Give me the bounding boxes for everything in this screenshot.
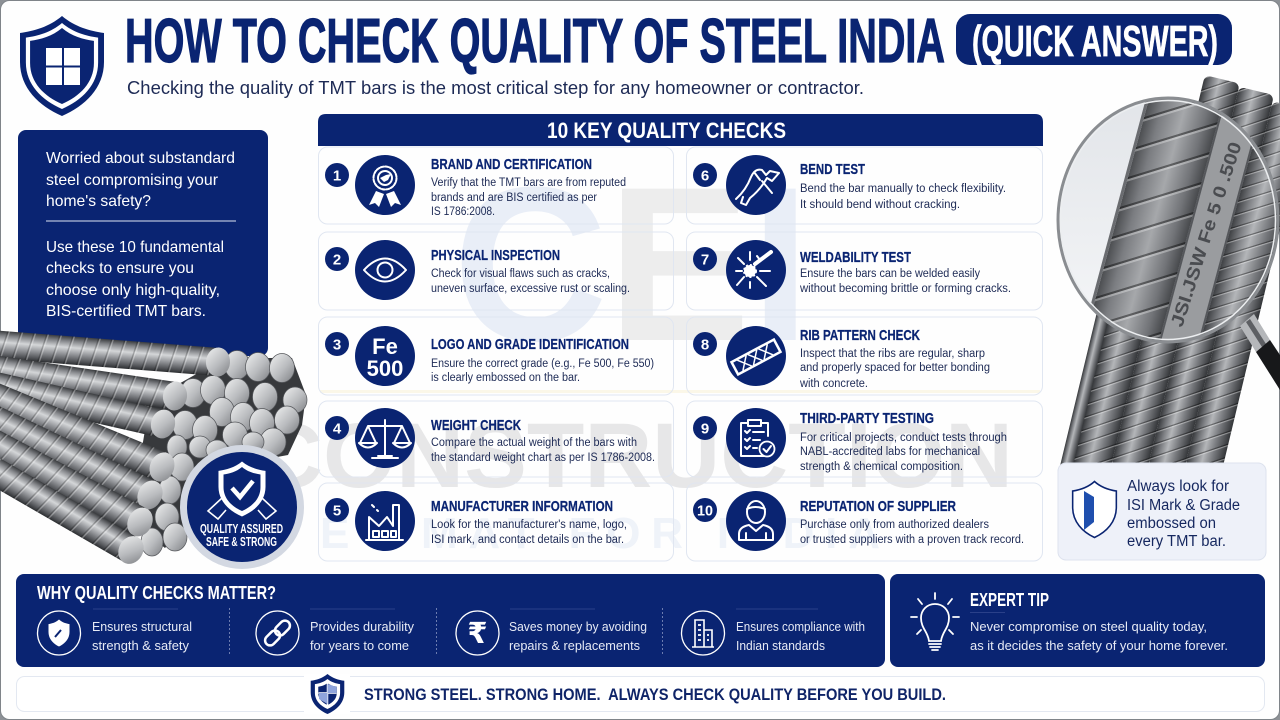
panel: expert tip: EXPERT TIP — [970, 590, 1049, 610]
footer banner — [16, 674, 1264, 714]
panel: intro: checks to ensure you — [46, 260, 194, 277]
reason: structural strength: strength & safety — [92, 638, 189, 653]
badge: quality assured — [180, 445, 304, 569]
panel: intro: Use these 10 fundamental — [46, 239, 224, 256]
check 4: weight check: the standard weight chart as per IS 1786-2008. — [431, 452, 655, 464]
check 1: brand and certification: Verify that the TMT bars are from reputed — [431, 177, 626, 189]
check 4: weight check: 4 — [333, 420, 342, 438]
magnifying glass handle — [1240, 314, 1280, 390]
callout: look for ISI mark: ISI Mark & Grade — [1127, 497, 1240, 514]
check 2: physical inspection: Check for visual flaws such as cracks, — [431, 268, 610, 280]
reason: saves money: ₹ — [467, 616, 488, 650]
badge: quality assured: SAFE & STRONG — [206, 535, 277, 549]
panel: expert tip — [890, 574, 1265, 667]
check 8: rib pattern check: Inspect that the ribs are regular, sharp — [800, 348, 985, 360]
check 3: logo and grade identification: Ensure the correct grade (e.g., Fe 500, Fe 550) — [431, 358, 654, 370]
check 3: logo and grade identification: 3 — [333, 336, 341, 354]
check 10: reputation of supplier: or trusted suppliers with a proven track record. — [800, 534, 1024, 546]
check 7: weldability test: Ensure the bars can be welded easily — [800, 268, 980, 280]
check 7: weldability test: WELDABILITY TEST — [800, 249, 911, 266]
reason: compliance — [682, 611, 865, 655]
image: TMT bars under magnifying glass — [1056, 76, 1280, 465]
check 7: weldability test: 7 — [701, 252, 709, 268]
check 8: rib pattern check — [686, 317, 1042, 395]
footer banner: STRONG STEEL. STRONG HOME. ALWAYS CHECK QUALITY BEFORE YOU BUILD. — [364, 686, 946, 704]
panel heading: 10 key quality checks: 10 KEY QUALITY CHECKS — [547, 118, 786, 143]
check 5: manufacturer information: Look for the manufacturer's name, logo, — [431, 519, 627, 531]
check 7: weldability test — [686, 232, 1042, 310]
check 8: rib pattern check: and properly spaced for better bonding — [800, 362, 990, 374]
panel: expert tip: Never compromise on steel quality today, — [970, 619, 1207, 634]
panel: intro: choose only high-quality, — [46, 282, 220, 299]
check 8: rib pattern check: with concrete. — [799, 378, 868, 390]
check 5: manufacturer information: ISI mark, and contact details on the bar. — [431, 534, 624, 546]
watermark: company logo and name — [255, 141, 1040, 558]
check 9: third-party testing: THIRD-PARTY TESTING — [800, 410, 934, 427]
check 5: manufacturer information: MANUFACTURER INFORMATION — [431, 498, 613, 515]
reason: structural strength — [38, 611, 192, 655]
check 9: third-party testing: For critical projects, conduct tests through — [800, 432, 1007, 444]
check 8: rib pattern check: 8 — [701, 336, 709, 354]
check 10: reputation of supplier: 10 — [697, 502, 713, 520]
icon: footer shield — [311, 674, 344, 714]
check 1: brand and certification: brands and are BIS certified as per — [431, 192, 597, 204]
check 6: bend test: 6 — [701, 168, 709, 184]
check 4: weight check: WEIGHT CHECK — [431, 417, 521, 434]
check 9: third-party testing: strength & chemical composition. — [800, 461, 963, 473]
check 1: brand and certification: IS 1786:2008. — [431, 206, 495, 218]
badge: quality assured: QUALITY ASSURED — [200, 522, 283, 536]
check 4: weight check — [318, 401, 674, 477]
check 4: weight check: Compare the actual weight of the bars with — [431, 437, 637, 449]
watermark: company logo and name: CONSTRUCTION — [255, 405, 1013, 507]
watermark: company logo and name: CEI — [453, 141, 810, 387]
panel: intro: Worried about substandard — [46, 150, 235, 167]
check 3: logo and grade identification — [318, 317, 674, 395]
check 9: third-party testing — [686, 401, 1042, 477]
callout: look for ISI mark: Always look for — [1127, 478, 1229, 495]
reason: structural strength: Ensures structural — [92, 619, 192, 634]
panel: expert tip: as it decides the safety of your home forever. — [970, 638, 1228, 653]
check 9: third-party testing: 9 — [701, 420, 709, 438]
check 3: logo and grade identification: LOGO AND GRADE IDENTIFICATION — [431, 336, 629, 353]
panel: why quality checks matter — [16, 574, 885, 667]
check 6: bend test — [686, 147, 1042, 224]
image: bundle of TMT bars — [0, 329, 307, 569]
check 6: bend test: BEND TEST — [800, 161, 865, 178]
check 2: physical inspection: uneven surface, excessive rust or scaling. — [431, 283, 630, 295]
magnified bar with stamped grade: JSI.JSW Fe 5 0 .500 — [1167, 140, 1245, 329]
check 1: brand and certification: BRAND AND CERTIFICATION — [431, 156, 592, 173]
check 5: manufacturer information: 5 — [333, 502, 341, 520]
check 8: rib pattern check: RIB PATTERN CHECK — [800, 327, 920, 344]
check 10: reputation of supplier: REPUTATION OF SUPPLIER — [800, 498, 956, 515]
check 1: brand and certification — [318, 147, 674, 224]
check 10: reputation of supplier — [686, 483, 1042, 561]
callout: look for ISI mark: embossed on — [1127, 515, 1216, 532]
logo: shield with window — [20, 16, 104, 116]
panel: why quality checks matter: WHY QUALITY CHECKS MATTER? — [37, 583, 276, 603]
reason: saves money: Saves money by avoiding — [509, 619, 647, 634]
check 3: logo and grade identification: is clearly embossed on the bar. — [431, 372, 580, 384]
check 9: third-party testing: NABL-accredited labs for mechanical — [800, 446, 980, 458]
icon: light bulb — [911, 593, 959, 650]
panel: intro: home's safety? — [46, 193, 151, 210]
reason: durability — [256, 611, 414, 655]
check 3: logo and grade identification: 500 — [367, 356, 403, 381]
callout: look for ISI mark — [1058, 463, 1266, 560]
check 1: brand and certification: 1 — [333, 168, 341, 184]
check 5: manufacturer information — [318, 483, 674, 561]
check 6: bend test: Bend the bar manually to check flexibility. — [800, 183, 1006, 195]
panel: intro: BIS-certified TMT bars. — [46, 303, 206, 320]
check 6: bend test: It should bend without cracking. — [800, 199, 960, 211]
reason: saves money — [456, 611, 647, 655]
check 7: weldability test: without becoming brittle or forming cracks. — [799, 283, 1011, 295]
magnified bar with stamped grade — [1090, 100, 1276, 340]
panel: intro: steel compromising your — [46, 172, 219, 189]
check 2: physical inspection: 2 — [333, 252, 341, 268]
check 2: physical inspection — [318, 232, 674, 310]
subtitle: Checking the quality of TMT bars is the most critical step for any homeowner or contractor. — [127, 77, 864, 98]
reason: compliance: Ensures compliance with — [736, 619, 865, 634]
check 3: logo and grade identification: Fe — [372, 334, 398, 359]
panel: intro — [18, 130, 268, 356]
callout: look for ISI mark: every TMT bar. — [1127, 533, 1226, 550]
check 2: physical inspection: PHYSICAL INSPECTION — [431, 247, 560, 264]
reason: durability: for years to come — [310, 638, 409, 653]
reason: compliance: Indian standards — [736, 638, 825, 653]
check 10: reputation of supplier: Purchase only from authorized dealers — [800, 519, 989, 531]
reason: saves money: repairs & replacements — [509, 638, 640, 653]
panel heading: 10 key quality checks — [318, 114, 1043, 146]
watermark: company logo and name: ET MAT FOR INDIA — [320, 509, 880, 558]
reason: durability: Provides durability — [310, 619, 414, 634]
